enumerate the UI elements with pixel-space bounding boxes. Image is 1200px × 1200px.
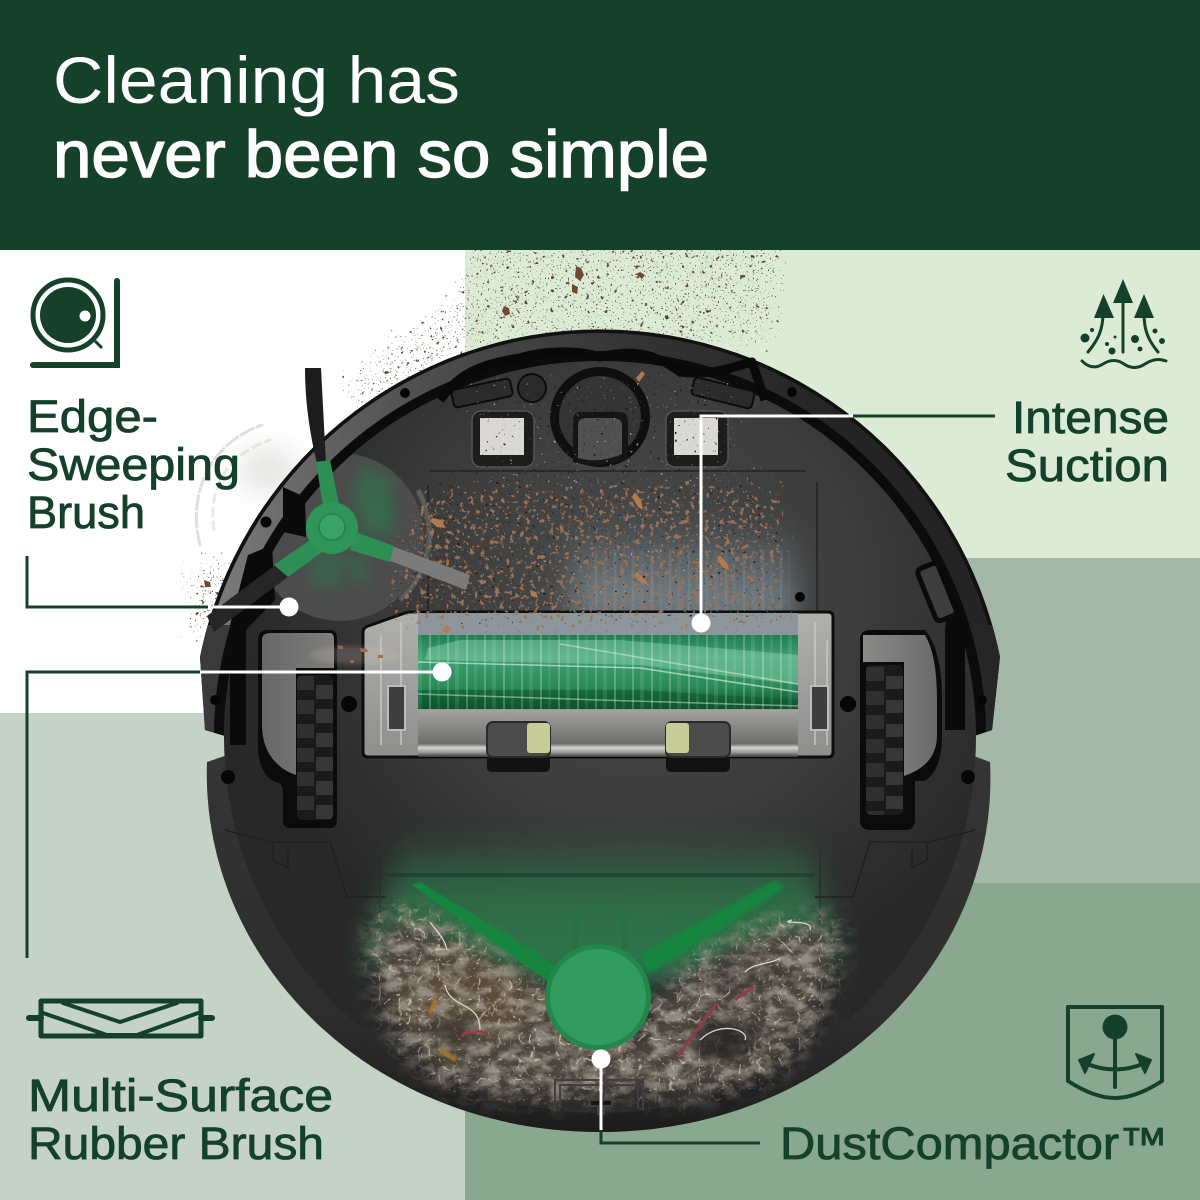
bin handle outline (575, 908, 625, 950)
bottom bar (418, 710, 798, 757)
label: intense suction (1005, 392, 1169, 491)
title (53, 43, 709, 191)
green compactor hub (545, 944, 651, 1050)
groove ring (214, 351, 986, 736)
front slots (451, 374, 755, 409)
label: edge-sweeping brush: Brush (27, 487, 145, 538)
left wheel (258, 630, 337, 828)
label: intense suction: Intense (1012, 392, 1169, 443)
title: never been so simple (53, 117, 709, 191)
title: Cleaning has (53, 43, 460, 117)
label: multi-surface rubber brush: Rubber Brush (28, 1118, 324, 1169)
panel: rubber brush background (0, 713, 465, 1200)
rear latch (555, 1080, 643, 1114)
green compactor right arm (640, 880, 785, 975)
debris spray behind robot (155, 190, 810, 670)
callout: suction line (692, 416, 995, 632)
label: intense suction: Suction (1005, 440, 1169, 491)
side brush (207, 368, 470, 632)
bumper lower shading (200, 625, 1000, 736)
motion blur blades (350, 465, 395, 530)
label: multi-surface rubber brush: Multi-Surface (28, 1070, 333, 1121)
cliff sensor right (666, 411, 728, 467)
icon: intense suction (1080, 279, 1166, 368)
bin seam lines (225, 830, 975, 925)
side brush motion trail (196, 425, 298, 545)
latch left (487, 722, 550, 772)
dust bin glow (365, 835, 835, 985)
label: multi-surface rubber brush (28, 1070, 333, 1169)
bumper hole dots (210, 387, 987, 705)
label: edge-sweeping brush: Sweeping (27, 439, 240, 490)
plate panel lines (428, 471, 817, 640)
label: dustcompactor: DustCompactor™ (780, 1118, 1168, 1169)
rim band (201, 333, 998, 736)
coloured fibres (462, 1031, 487, 1037)
arms (316, 460, 339, 506)
right wheel (860, 630, 942, 830)
panel: edge-sweeping brush background (0, 250, 465, 713)
dark hollow tufts (691, 1018, 759, 1062)
label: edge-sweeping brush: Edge- (27, 391, 158, 442)
panel: intense suction background (465, 250, 1200, 558)
front black groove (440, 352, 765, 400)
green compactor left arm (411, 882, 560, 984)
callout: rubber brush line (27, 662, 452, 958)
icon: edge sweeping (33, 280, 117, 365)
panel: middle right background (465, 558, 1200, 883)
cliff sensor left (472, 411, 534, 467)
airflow tint above brush head (570, 520, 795, 620)
callout: dustcompactor line (592, 1050, 760, 1143)
roller (418, 635, 800, 709)
side button right (916, 562, 958, 622)
icon: dustcompactor (1068, 1007, 1162, 1098)
debris on robot (310, 345, 815, 664)
screw holes (221, 592, 975, 784)
robot bumper (200, 329, 1000, 752)
robot vacuum (195, 329, 1004, 1141)
bristles (305, 368, 326, 464)
hub (306, 502, 358, 554)
cleaning head frame (363, 612, 833, 772)
side slots (388, 686, 405, 730)
label: edge-sweeping brush (27, 391, 240, 538)
caster wheel (550, 367, 650, 467)
dust and hair (370, 911, 841, 1100)
inner plate (224, 361, 976, 1113)
side brush module (256, 453, 429, 621)
black wheel channels (230, 487, 965, 745)
robot lower body (207, 749, 990, 1132)
header band (0, 0, 1200, 250)
icon: rubber brush (29, 1001, 212, 1036)
panel: dustcompactor background (465, 883, 1200, 1200)
latch right (666, 722, 730, 772)
callout: edge-sweeping brush line (27, 556, 298, 616)
